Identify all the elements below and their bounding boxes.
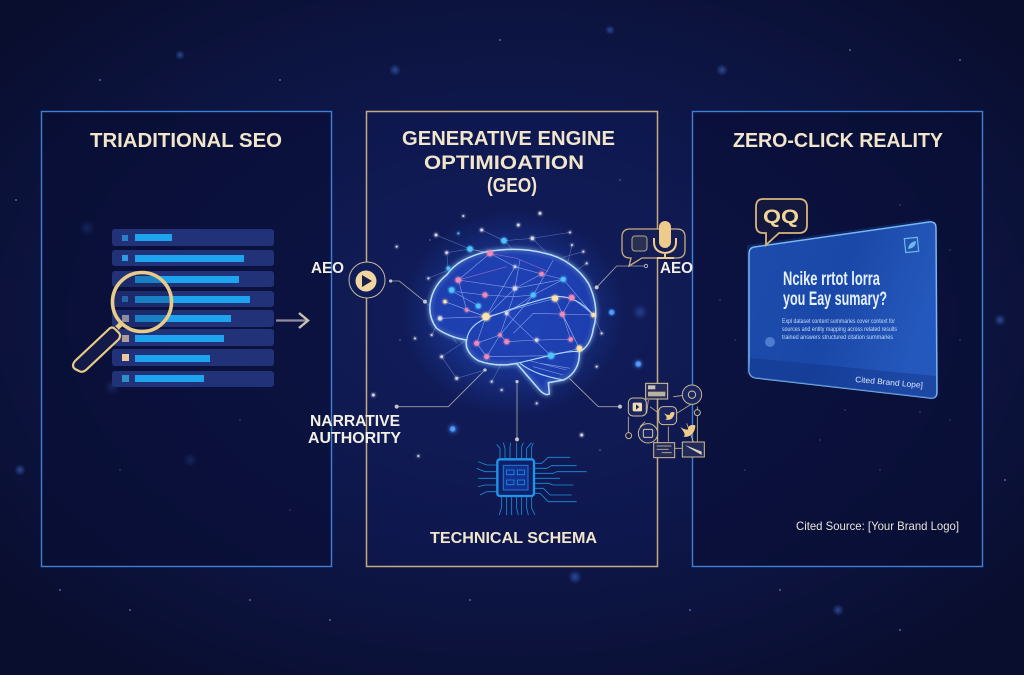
- icon: magnifying glass: [73, 272, 172, 372]
- connector lines: [389, 264, 648, 441]
- AI answer card: Cited Brand Lope]: [855, 375, 923, 390]
- AI answer card: sources and entity mapping across related results: [782, 327, 897, 333]
- panel: traditional SEO: [42, 112, 332, 566]
- AI answer card: trained answers structured citation summaries: [782, 335, 893, 341]
- network nodes: [372, 212, 641, 457]
- icon: social media cluster: [626, 383, 704, 458]
- arrow: to GEO: [276, 313, 308, 328]
- inner network lines: [440, 249, 593, 375]
- icon: Q&A speech bubble: [756, 199, 807, 245]
- heading: GEO: (GEO): [487, 175, 537, 197]
- heading: traditional SEO: TRIADITIONAL SEO: [90, 130, 282, 152]
- outer network lines: [425, 230, 602, 382]
- heading: GEO: OPTIMIOATION: [424, 153, 584, 174]
- brain outline: [430, 249, 596, 395]
- AI answer card: Ncike rrtot lorra: [783, 269, 880, 290]
- label: narrative authority: [308, 413, 401, 447]
- AI answer card: [747, 219, 937, 398]
- icon: Q&A speech bubble: QQ: [763, 207, 799, 228]
- label: AEO left: AEO: [311, 260, 344, 277]
- text: cited source: Cited Source: [Your Brand Logo]: [796, 519, 959, 533]
- AI answer card: you Eay sumary?: [783, 289, 887, 310]
- heading: zero-click reality: ZERO-CLICK REALITY: [733, 130, 944, 152]
- icon: circuit chip: [477, 443, 587, 515]
- heading: GEO: GENERATIVE ENGINE: [402, 128, 615, 150]
- icon: play button: [349, 262, 385, 298]
- brain network: [372, 210, 648, 457]
- panel: generative engine optimization: [366, 112, 658, 566]
- AI answer card: Expl dataset content summaries cover context for: [782, 319, 895, 325]
- label: technical schema: TECHNICAL SCHEMA: [430, 530, 597, 547]
- label: narrative authority: NARRATIVE: [310, 413, 400, 430]
- icon: speech bubble and microphone: [622, 221, 685, 266]
- search results list: [112, 229, 274, 387]
- panel: zero-click reality: [692, 112, 982, 566]
- label: narrative authority: AUTHORITY: [308, 430, 401, 447]
- label: AEO right: AEO: [660, 260, 693, 277]
- heading: GEO: [402, 128, 615, 197]
